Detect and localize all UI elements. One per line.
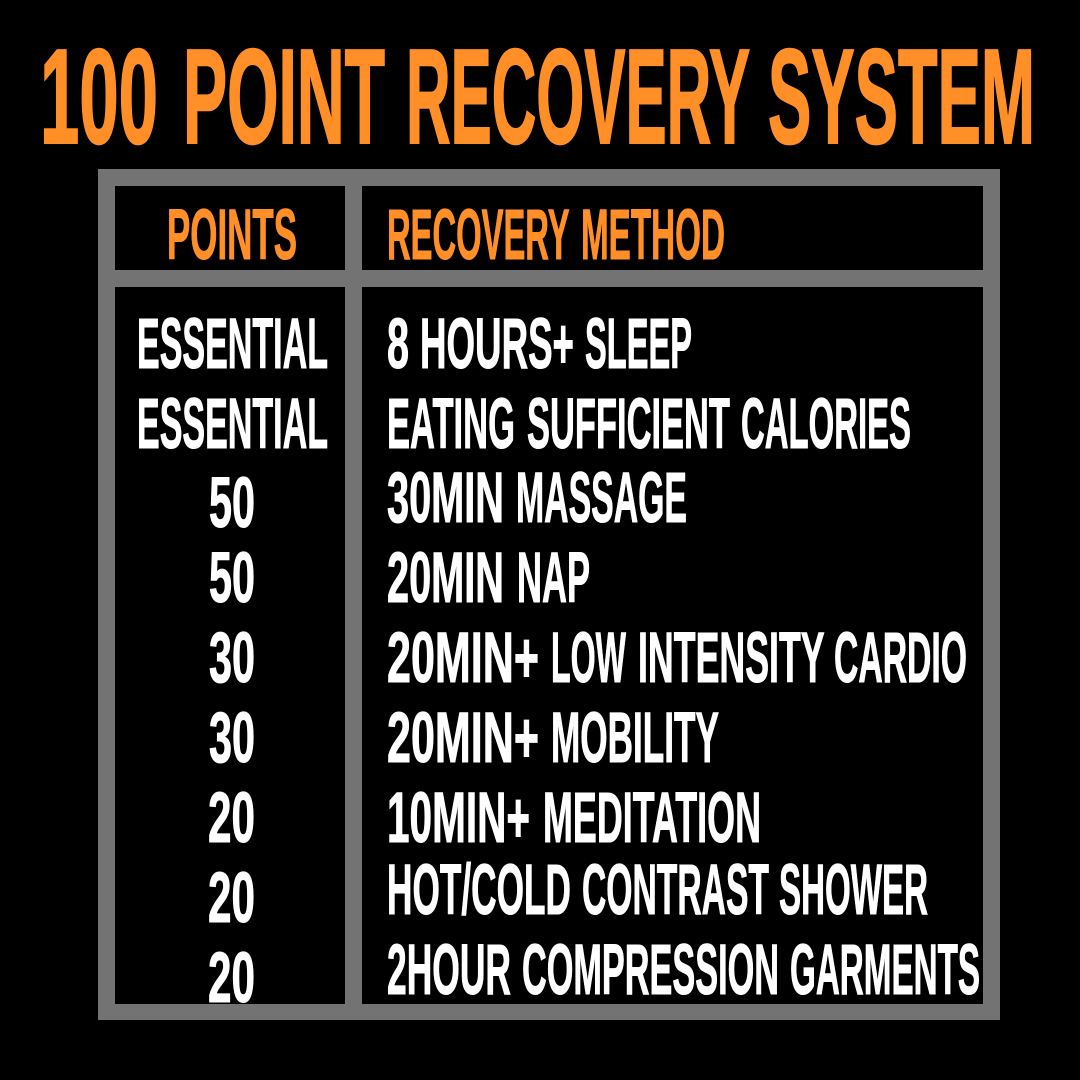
recovery method column: HOT/COLD bbox=[387, 851, 571, 930]
points column: 30 bbox=[209, 699, 255, 778]
points column: 20 bbox=[208, 859, 255, 938]
header: recovery method: RECOVERY bbox=[387, 196, 569, 275]
title: POINT bbox=[183, 21, 385, 172]
recovery method column: 20MIN bbox=[387, 539, 504, 618]
table: ESSENTIAL bbox=[137, 385, 328, 464]
recovery method column: EATING bbox=[387, 385, 515, 464]
recovery method column: 2HOUR bbox=[387, 931, 511, 1010]
recovery method column: CONTRAST bbox=[582, 851, 769, 930]
recovery method column bbox=[387, 305, 980, 1010]
recovery method column: MASSAGE bbox=[516, 459, 687, 538]
points column bbox=[137, 305, 328, 1018]
table: METHOD bbox=[581, 196, 725, 275]
recovery method column: 20MIN+ bbox=[387, 619, 539, 698]
table bbox=[98, 169, 1000, 1020]
points column: 50 bbox=[209, 539, 255, 618]
title: 100 bbox=[40, 21, 158, 172]
points column: 50 bbox=[209, 464, 255, 543]
table: ESSENTIAL bbox=[137, 305, 328, 384]
recovery method column: HOURS+ bbox=[420, 305, 574, 384]
recovery method column: SLEEP bbox=[585, 305, 692, 384]
recovery method column: LOW bbox=[551, 619, 626, 698]
recovery method column: 20MIN+ bbox=[387, 699, 539, 778]
recovery method column: INTENSITY bbox=[638, 619, 824, 698]
recovery method column: 8 bbox=[387, 305, 409, 384]
table: POINTS bbox=[167, 196, 297, 275]
recovery method column: 30MIN bbox=[387, 459, 504, 538]
points column: 30 bbox=[209, 619, 255, 698]
points column: 20 bbox=[208, 939, 255, 1018]
recovery method column: MEDITATION bbox=[543, 779, 761, 858]
recovery method column: MOBILITY bbox=[551, 699, 719, 778]
table grid frame bbox=[98, 169, 1000, 1020]
recovery method column: COMPRESSION bbox=[522, 931, 779, 1010]
recovery method column: SUFFICIENT bbox=[527, 385, 730, 464]
recovery method column: NAP bbox=[517, 539, 590, 618]
points column: 20 bbox=[208, 779, 255, 858]
recovery method column: 10MIN+ bbox=[387, 779, 530, 858]
